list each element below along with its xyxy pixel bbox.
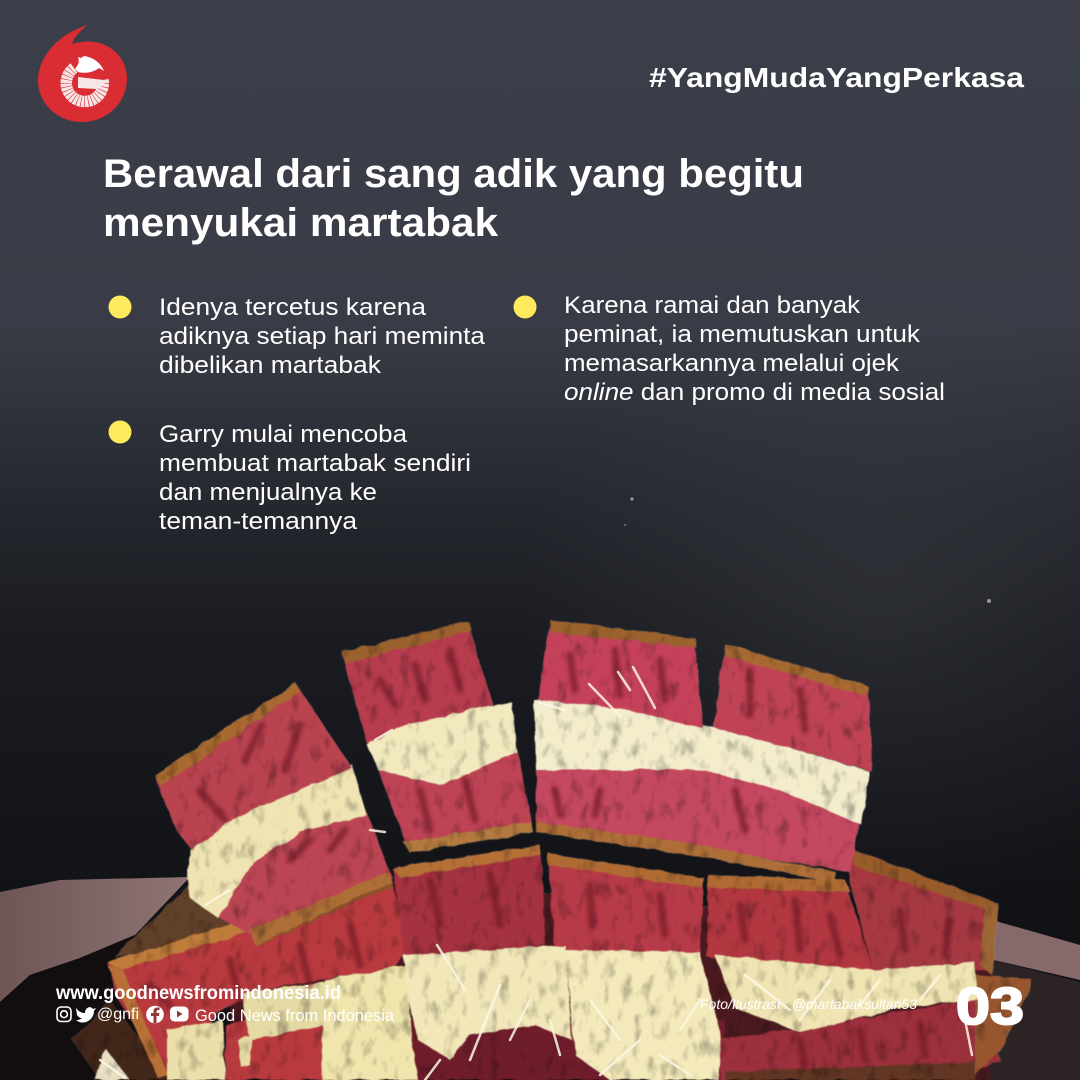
bullet text: Karena ramai dan banyak — [564, 292, 861, 319]
bullet text: teman-temannya — [159, 508, 358, 535]
second stack — [378, 745, 532, 848]
bullet dot — [514, 296, 536, 318]
bullet text: Garry mulai mencoba — [159, 421, 408, 448]
logo drop — [38, 25, 127, 122]
lower row red slices — [392, 845, 546, 958]
title — [103, 152, 804, 245]
bullet text: membuat martabak sendiri — [159, 450, 471, 477]
bullet text: dan menjualnya ke — [159, 479, 377, 506]
lower left crust wedge — [115, 885, 255, 957]
bullet: idea — [108, 294, 486, 379]
footer: website and social links — [55, 983, 395, 1025]
bottom row dark red fill — [405, 1020, 725, 1080]
bullet dot — [108, 420, 132, 444]
photo texture: crumb holes and coconut shreds — [100, 650, 972, 1080]
icon: facebook — [146, 1006, 164, 1023]
bullet text — [564, 292, 945, 406]
bullet text: memasarkannya melalui ojek — [564, 350, 900, 377]
third stack top red — [538, 622, 703, 728]
bullet: trying to make — [108, 420, 471, 535]
handle: @gnfi — [97, 1006, 139, 1023]
bullet text: online dan promo di media sosial — [564, 379, 945, 406]
brand name: Good News from Indonesia — [195, 1006, 395, 1025]
bullet text: dibelikan martabak — [159, 352, 382, 379]
left stack lower red — [215, 808, 392, 935]
bullet text: peminat, ia memutuskan untuk — [564, 321, 921, 348]
bottom cheese — [403, 945, 572, 1060]
third stack red lower — [536, 762, 862, 872]
bullet text: adiknya setiap hari meminta — [159, 323, 486, 350]
icon: instagram — [57, 1007, 71, 1022]
title: menyukai martabak — [103, 201, 499, 245]
left stack cheese — [187, 764, 367, 918]
underlay between pieces — [230, 880, 990, 1080]
bullet: marketing — [514, 292, 945, 406]
table and plate — [0, 877, 1080, 1080]
bullet text — [159, 294, 486, 379]
bullet text — [159, 421, 471, 535]
bottom left brown crust — [72, 1000, 170, 1080]
photo credit: Foto/Ilustrasi : @martabaksultan53 — [700, 997, 918, 1012]
page number: 03 — [956, 978, 1024, 1036]
icon: twitter — [76, 1007, 96, 1023]
third stack cheese band — [534, 698, 870, 825]
photo: stacked martabak pieces — [72, 620, 1032, 1080]
logo emblem — [66, 56, 105, 102]
logo: red drop with Garuda emblem — [38, 25, 127, 122]
bullet dot — [108, 296, 132, 318]
lower row left red slice — [107, 880, 410, 1078]
left stack top red — [155, 684, 352, 850]
title: Berawal dari sang adik yang begitu — [103, 152, 804, 196]
website: www.goodnewsfromindonesia.id — [55, 983, 341, 1004]
hashtag: #YangMudaYangPerkasa — [649, 62, 1024, 93]
icon: youtube — [170, 1006, 188, 1022]
bullet text: Idenya tercetus karena — [159, 294, 427, 321]
